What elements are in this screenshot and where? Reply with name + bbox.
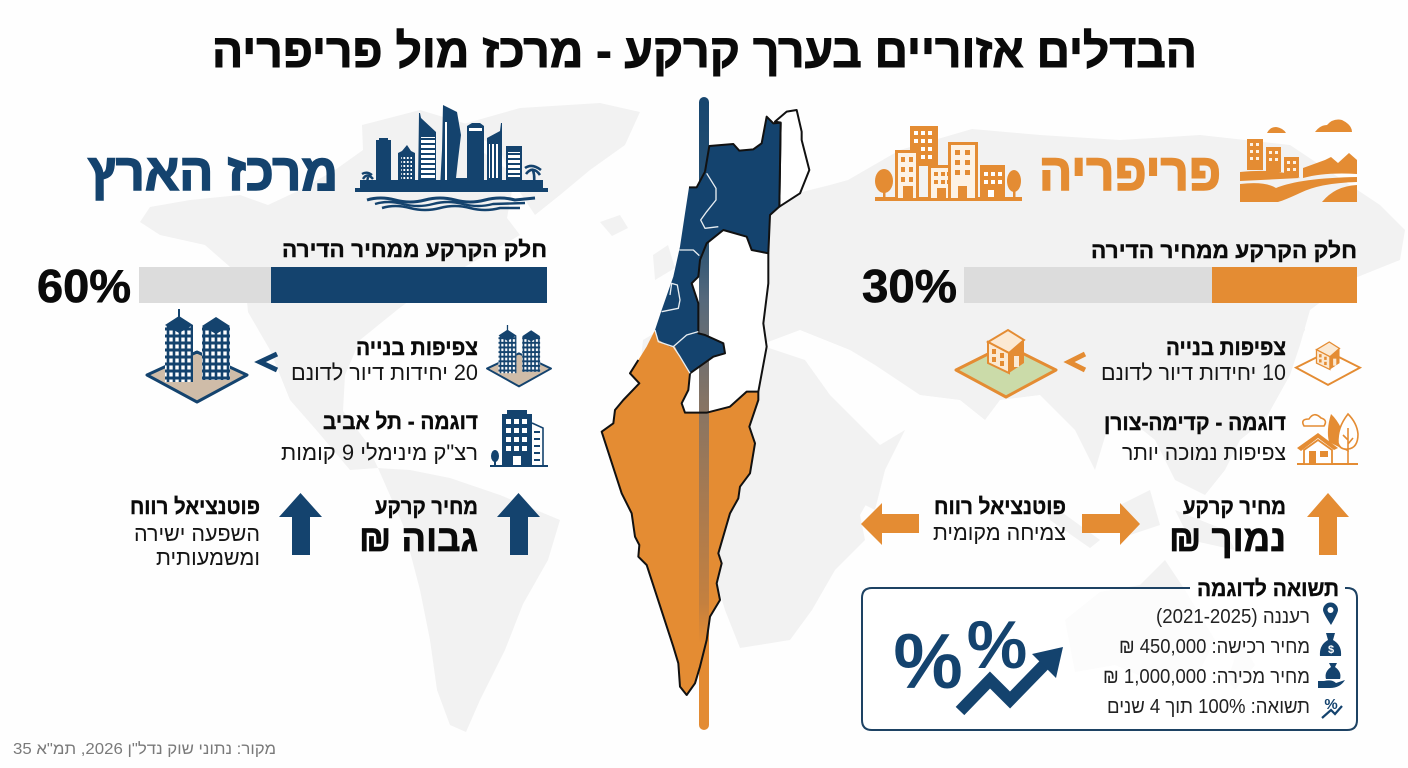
icon: low density large <box>956 330 1056 397</box>
icon: office building <box>490 410 548 467</box>
example text: צפיפות נמוכה יותר <box>1122 440 1286 465</box>
arrow: land price up <box>497 493 540 555</box>
example text: דוגמה - תל אביב <box>323 409 478 434</box>
comparison mark <box>1069 354 1085 370</box>
profit text: צמיחה מקומית <box>933 520 1066 545</box>
borders <box>602 117 781 695</box>
land price text: מחיר קרקע <box>375 494 478 519</box>
density text: צפיפות בנייה <box>1166 335 1286 360</box>
arrow: right <box>1082 503 1140 545</box>
profit text: השפעה ישירה <box>134 521 260 546</box>
icon: low density small <box>1296 342 1360 385</box>
box frame <box>862 588 1357 730</box>
land price text: גבוה ₪ <box>359 518 478 559</box>
row: sale price: מחיר מכירה: 1,000,000 ₪ <box>1103 666 1310 688</box>
row: purchase price: מחיר רכישה: 450,000 ₪ <box>1119 636 1310 658</box>
profit text: פוטנציאל רווח <box>130 494 260 519</box>
row: location: רעננה (2021-2025) <box>1156 606 1310 628</box>
panel: sample return <box>862 576 1357 730</box>
land price text: מחיר קרקע <box>1183 494 1286 519</box>
icon: skyline <box>355 105 548 210</box>
profit text <box>933 494 1066 545</box>
row: return: תשואה: 100% תוך 4 שנים <box>1107 696 1310 718</box>
land price text <box>1169 494 1286 559</box>
heading: periphery: פריפריה <box>1039 144 1221 202</box>
arrow: left <box>861 503 919 545</box>
region: centre and north <box>655 117 781 373</box>
row: purchase price: $ <box>1328 644 1334 656</box>
map of Israel with central divider <box>602 97 809 730</box>
comparison mark <box>260 354 277 370</box>
bar chart: 30% <box>964 267 1357 303</box>
icon: landscape <box>1240 120 1357 202</box>
heading: centre: מרכז הארץ <box>88 144 338 202</box>
panel: centre <box>37 105 551 570</box>
icon: density towers small <box>487 325 551 386</box>
example text <box>1104 410 1286 465</box>
density text <box>1101 335 1286 385</box>
example text <box>281 409 478 465</box>
icon: town <box>875 126 1022 201</box>
district lines <box>655 173 718 373</box>
arrow: land price up <box>1307 493 1349 555</box>
bar label: חלק הקרקע ממחיר הדירה <box>282 237 547 262</box>
density text: 20 יחידות דיור לדונם <box>291 360 478 385</box>
background world map <box>140 103 1405 732</box>
bar chart: 60% <box>139 267 547 303</box>
box title: תשואה לדוגמה <box>1197 576 1339 601</box>
icon: percent growth <box>893 607 1063 711</box>
profit text: פוטנציאל רווח <box>934 494 1066 519</box>
density text <box>291 335 478 385</box>
row: return: % <box>1324 696 1338 713</box>
density text: צפיפות בנייה <box>356 335 478 360</box>
example text: דוגמה - קדימה-צורן <box>1104 410 1286 435</box>
land price text: נמוך ₪ <box>1169 518 1286 559</box>
region: Golan <box>775 110 809 207</box>
divider visible segment <box>699 240 709 642</box>
title: הבדלים אזוריים בערך קרקע - מרכז מול פריפריה <box>212 24 1197 77</box>
example text: רצ"ק מינימלי 9 קומות <box>281 440 478 465</box>
region: periphery south <box>602 330 758 695</box>
icon: percent growth: % <box>967 607 1027 683</box>
value: 60%: 60% <box>37 260 131 312</box>
panel: periphery <box>861 120 1360 559</box>
region: West Bank <box>682 230 768 413</box>
icon: density towers large <box>147 309 247 402</box>
source note: מקור: נתוני שוק נדל"ן 2026, תמ"א 35 <box>13 740 276 758</box>
arrow: profit up <box>279 493 322 555</box>
value: 30%: 30% <box>862 260 957 312</box>
divider rod <box>699 97 709 730</box>
land price text <box>359 494 478 559</box>
icon: house and trees <box>1297 414 1358 465</box>
bar label: חלק הקרקע ממחיר הדירה <box>1091 238 1357 263</box>
profit text <box>130 494 260 570</box>
profit text: ומשמעותית <box>156 545 260 570</box>
icon: percent growth: % <box>893 617 963 705</box>
density text: 10 יחידות דיור לדונם <box>1101 360 1286 385</box>
